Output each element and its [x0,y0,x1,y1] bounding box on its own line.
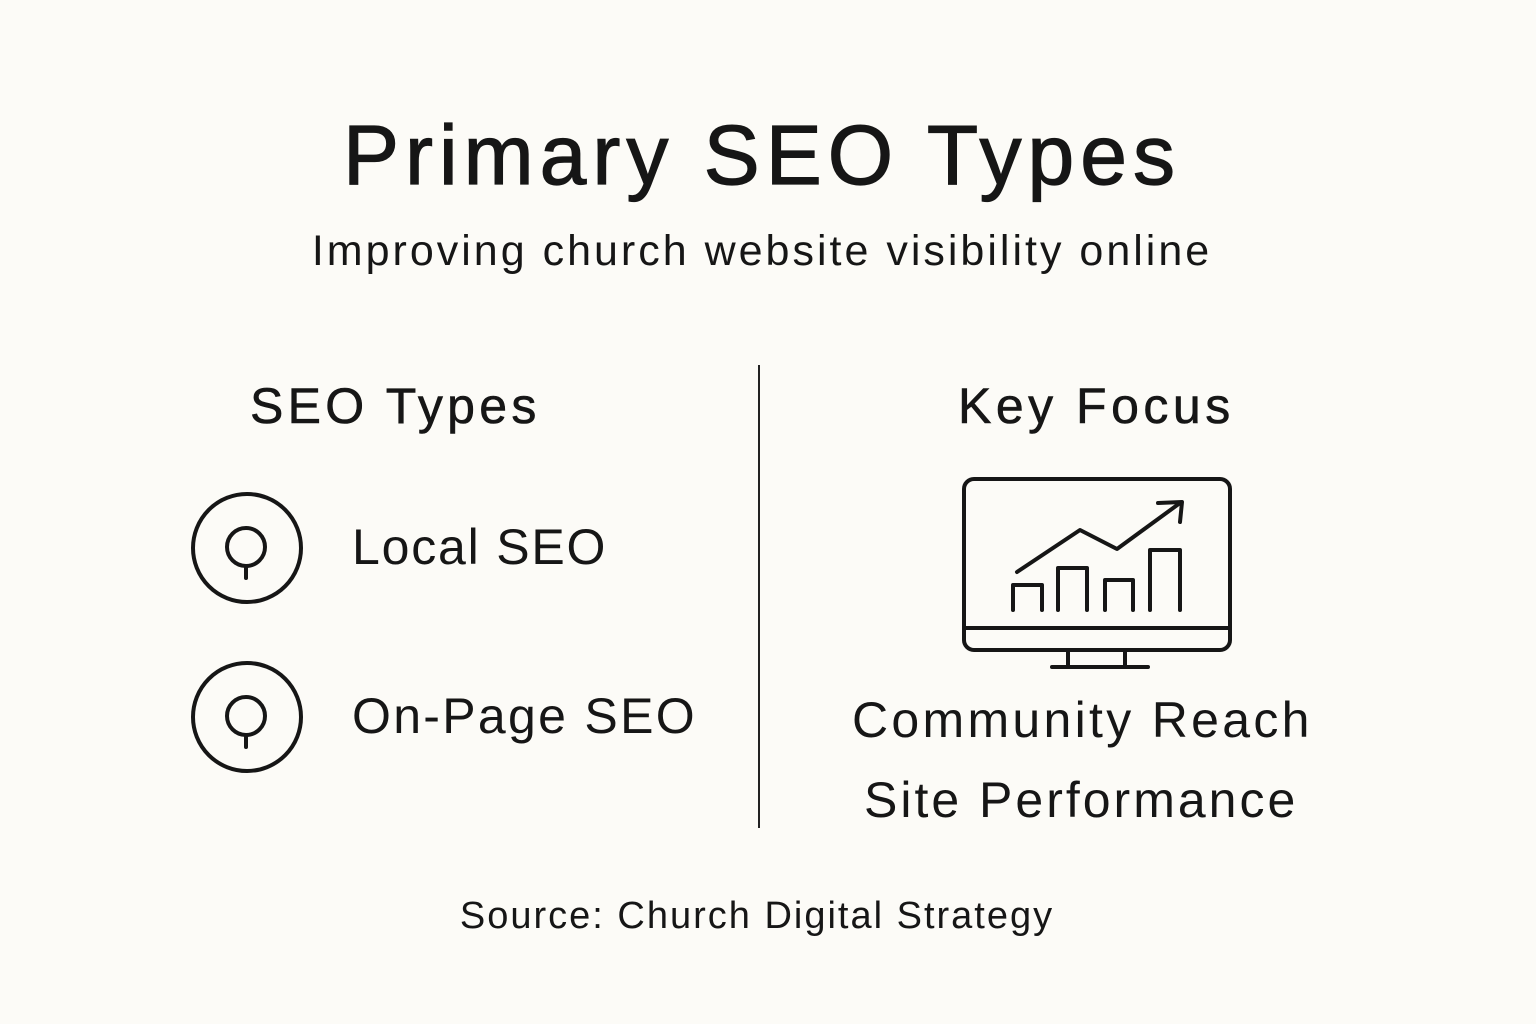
icon: monitor with growth chart [962,477,1232,669]
icon: location pin (Local SEO) [191,492,303,604]
source: Source: Church Digital Strategy [460,895,1054,937]
heading: Key Focus: Key Focus [958,378,1235,434]
text: Local SEO: Local SEO [352,519,607,575]
panel: Key Focus [852,378,1313,828]
text: Site Performance: Site Performance [864,772,1298,828]
icon: location pin (On-Page SEO) [191,661,303,773]
panel: SEO types [191,378,697,773]
heading: SEO Types: SEO Types [250,378,541,434]
subtitle: Improving church website visibility online [312,227,1212,275]
text: Community Reach: Community Reach [852,692,1313,748]
divider [758,365,760,828]
text: On-Page SEO: On-Page SEO [352,688,697,744]
title: Primary SEO Types [343,108,1181,202]
